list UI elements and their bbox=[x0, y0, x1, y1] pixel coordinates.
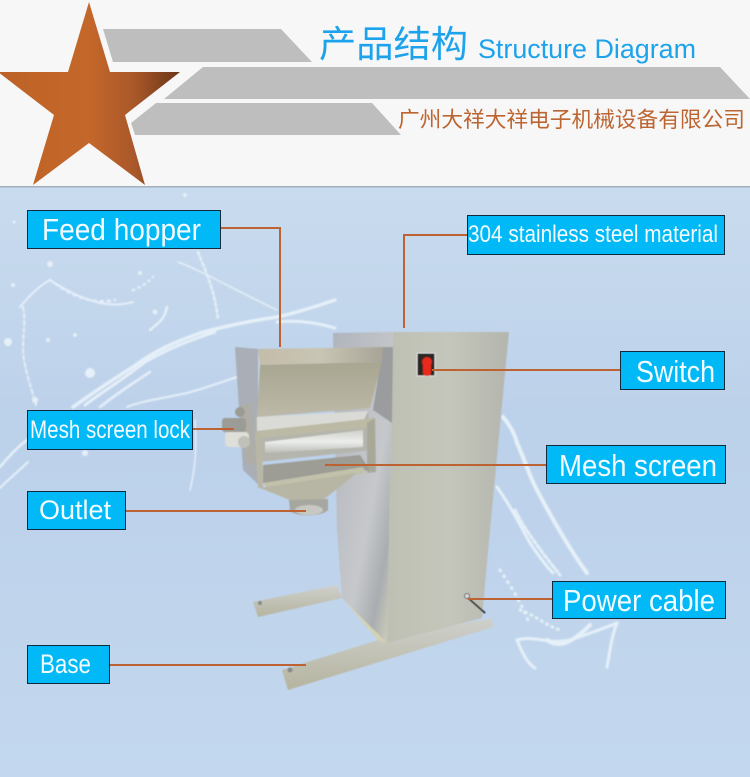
back base bar bbox=[253, 585, 342, 617]
callout: power cable: Power cable bbox=[563, 583, 715, 618]
back side panel bbox=[333, 332, 393, 643]
front panel bbox=[387, 332, 509, 643]
title: 产品结构 bbox=[319, 24, 468, 65]
callout: mesh screen bbox=[325, 446, 726, 484]
callout: switch bbox=[432, 352, 724, 390]
switch bbox=[417, 353, 435, 376]
company name: 广州大祥大祥电子机械设备有限公司 bbox=[398, 107, 745, 132]
callout: mesh screen lock: Mesh screen lock bbox=[30, 416, 190, 444]
mesh tray bbox=[263, 455, 370, 488]
outlet funnel bbox=[260, 473, 357, 515]
panel: diagram background bbox=[0, 186, 750, 777]
mesh cylinder bbox=[255, 411, 376, 488]
callout: outlet bbox=[28, 492, 306, 530]
callout: feed hopper: Feed hopper bbox=[42, 212, 201, 247]
callout: stainless steel: 304 stainless steel material bbox=[468, 221, 718, 248]
callout: outlet: Outlet bbox=[39, 495, 111, 525]
lock clamp bbox=[222, 403, 256, 466]
title bbox=[319, 24, 696, 65]
callout: mesh screen lock bbox=[28, 410, 234, 450]
hopper bbox=[235, 347, 393, 488]
front base bar bbox=[282, 598, 493, 690]
callout: switch: Switch bbox=[636, 354, 715, 389]
callout: feed hopper bbox=[28, 210, 280, 347]
power cable bbox=[467, 597, 485, 613]
header background bbox=[0, 0, 750, 186]
callout: stainless steel bbox=[404, 216, 724, 328]
grey banner shapes bbox=[103, 29, 750, 135]
water splash bbox=[0, 193, 617, 668]
callout: power cable bbox=[468, 582, 726, 618]
icon: orange star bbox=[0, 2, 180, 185]
callout: mesh screen: Mesh screen bbox=[559, 448, 717, 483]
callout: base: Base bbox=[40, 649, 91, 679]
callout: base bbox=[28, 646, 306, 684]
machine bbox=[222, 332, 509, 690]
title: Structure Diagram bbox=[478, 34, 696, 64]
